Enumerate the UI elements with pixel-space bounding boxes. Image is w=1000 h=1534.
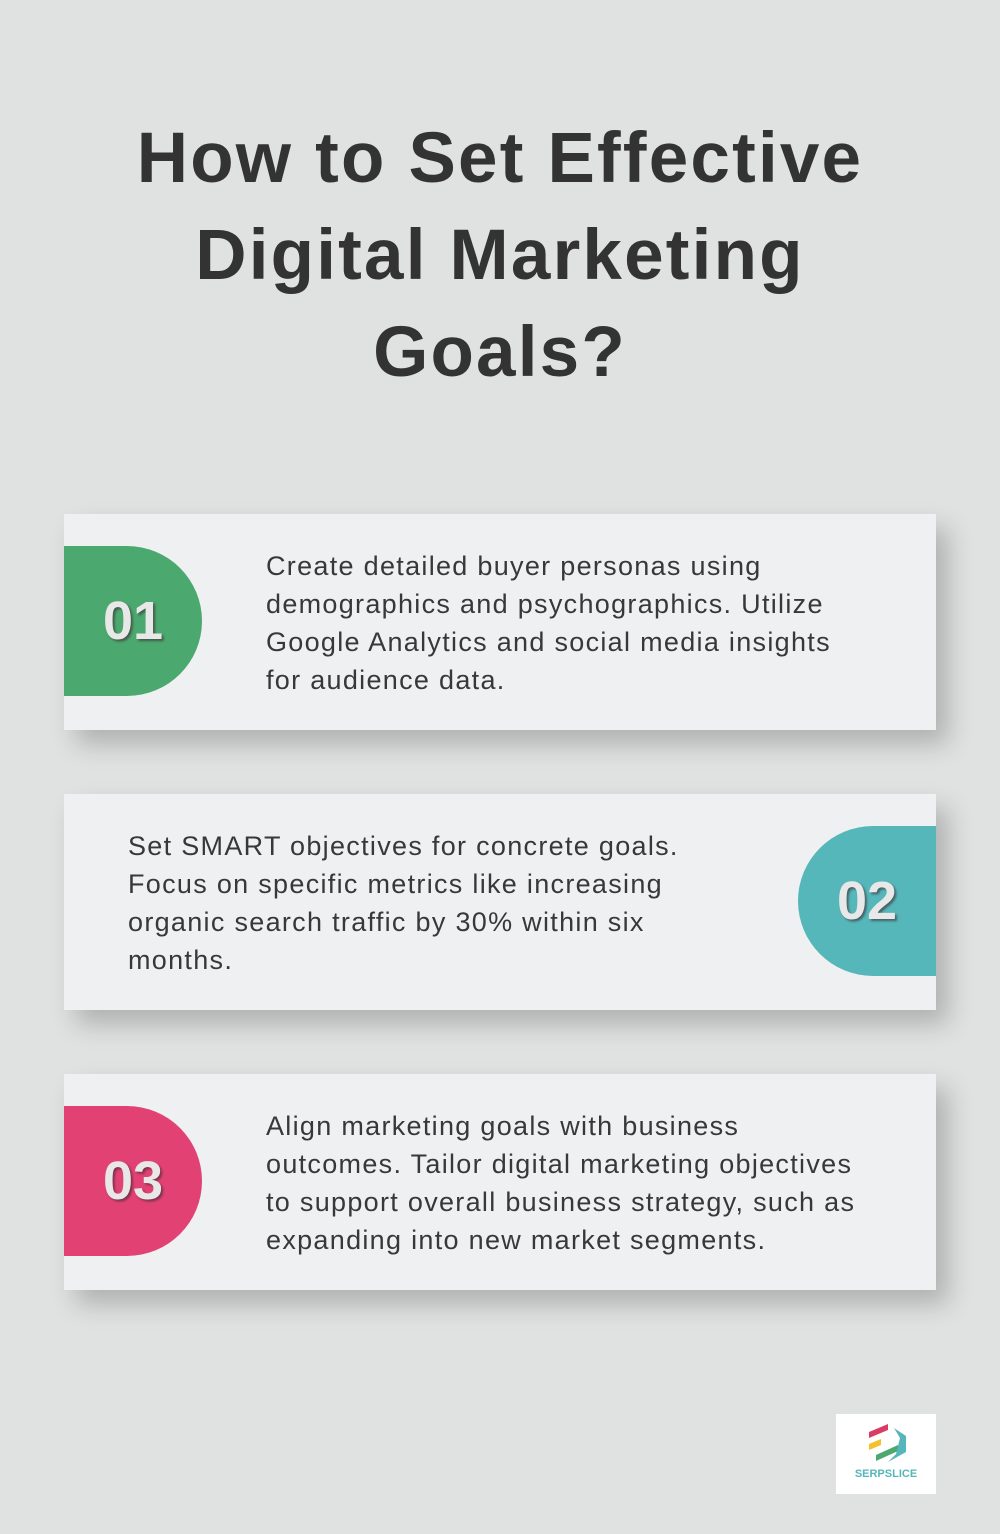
panel: step 3 (64, 1074, 936, 1290)
icon: logo mark (869, 1424, 906, 1462)
title: Goals? (373, 313, 627, 392)
panel: step 2 (64, 794, 936, 1010)
text step 2: Set SMART objectives for concrete goals. (128, 831, 679, 861)
text step 3: outcomes. Tailor digital marketing objectives (266, 1149, 852, 1179)
panel: step 1 (64, 514, 936, 730)
text step 3: expanding into new market segments. (266, 1225, 766, 1255)
badge 01 (64, 546, 202, 696)
badge 03: 03 (103, 1151, 163, 1211)
text step 1: Create detailed buyer personas using (266, 551, 762, 581)
text step 2: months. (128, 945, 233, 975)
logo (836, 1414, 936, 1494)
text step 1: for audience data. (266, 665, 506, 695)
title (137, 119, 863, 392)
text step 3: to support overall business strategy, such as (266, 1187, 855, 1217)
logo text: SERPSLICE (855, 1468, 917, 1480)
text step 2 (128, 831, 679, 975)
badge 02: 02 (837, 871, 897, 931)
text step 3 (266, 1111, 855, 1255)
text step 1 (266, 551, 831, 695)
text step 1: Google Analytics and social media insights (266, 627, 831, 657)
badge 03 (64, 1106, 202, 1256)
text step 2: Focus on specific metrics like increasing (128, 869, 663, 899)
text step 2: organic search traffic by 30% within six (128, 907, 645, 937)
badge 02 (798, 826, 936, 976)
text step 1: demographics and psychographics. Utilize (266, 589, 824, 619)
badge 01: 01 (103, 591, 163, 651)
title: Digital Marketing (195, 216, 805, 295)
title: How to Set Effective (137, 119, 863, 198)
text step 3: Align marketing goals with business (266, 1111, 739, 1141)
